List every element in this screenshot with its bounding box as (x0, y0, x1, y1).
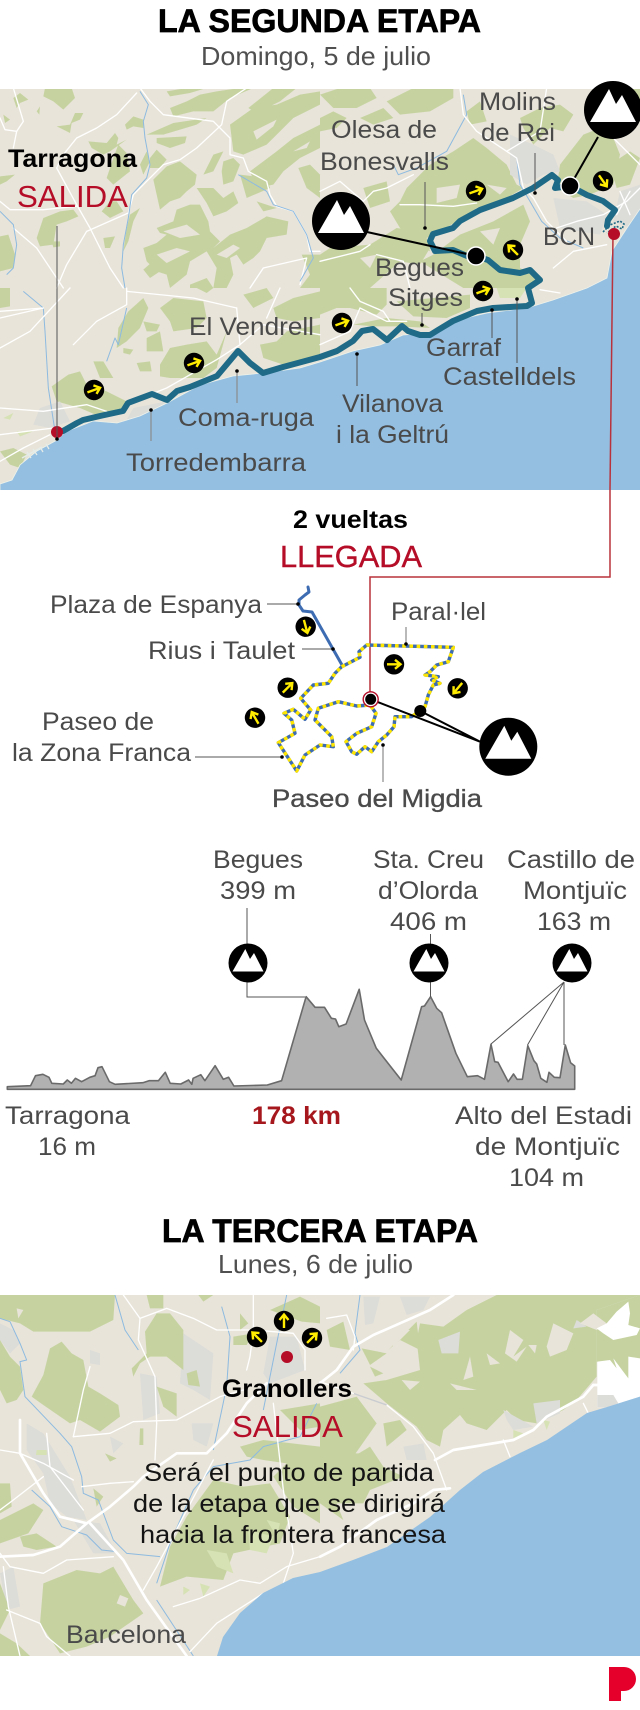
label: castillo: Montjuïc (523, 877, 627, 905)
heading: finish: LLEGADA (280, 539, 422, 574)
icon: mountain sta creu (410, 944, 448, 982)
leader: coma-ruga (235, 369, 239, 403)
label: begues (213, 846, 303, 905)
leader: castelldels (515, 297, 519, 363)
label: sta creu: Sta. Creu (373, 846, 484, 874)
route: barcelona detail (603, 221, 624, 233)
label: castillo: 163 m (537, 908, 611, 936)
sea (215, 1396, 640, 1658)
icon: direction arrow (293, 614, 318, 639)
icon: direction arrow (81, 377, 107, 403)
panel: map of stage three (0, 1295, 640, 1658)
label: granollers: Granollers (222, 1375, 352, 1403)
marker: barcelona (608, 228, 620, 240)
chart: elevation profile (5, 846, 635, 1192)
labels: map of stage two (8, 88, 595, 477)
route: circuit (278, 645, 453, 771)
labels: map of stage two: Molins (479, 88, 556, 116)
subtitle: domingo: Domingo, 5 de julio (201, 41, 431, 71)
labels: map of stage two: El Vendrell (189, 313, 314, 341)
icon: direction arrow (443, 674, 472, 703)
labels: map of stage two: Olesa de (331, 116, 437, 144)
label: distance: 178 km (252, 1102, 341, 1130)
route: stage two (57, 175, 615, 432)
labels: map of stage two: Castelldels (443, 363, 576, 391)
label: paseo del migdia: Paseo del Migdia (272, 785, 482, 813)
label: sta creu: 406 m (390, 908, 467, 936)
text block: description: de la etapa que se dirigirá (133, 1490, 445, 1518)
port of tarragona (22, 444, 49, 458)
logo (609, 1667, 636, 1701)
label: alto del estadi (455, 1102, 632, 1192)
labels: map of stage two: BCN (543, 223, 595, 251)
icon: mountain castillo (552, 944, 592, 982)
label: alto del estadi: Alto del Estadi (455, 1102, 632, 1130)
text block: description (133, 1459, 446, 1549)
icon: direction arrow (589, 167, 617, 195)
labels: map of stage two: i la Geltrú (336, 421, 449, 449)
text block: description: Será el punto de partida (144, 1459, 434, 1487)
label: sta creu (373, 846, 484, 936)
icon: direction arrow (298, 1324, 326, 1352)
subtitle: lunes: Lunes, 6 de julio (218, 1249, 413, 1279)
label: alto del estadi: de Montjuïc (475, 1133, 620, 1161)
label: paseo del migdia (272, 743, 482, 813)
panel: finish circuit in montjuic (12, 506, 537, 813)
route: approach from plaza de espanya (299, 587, 342, 665)
label: castillo (507, 846, 635, 936)
heading: two laps: 2 vueltas (293, 506, 408, 534)
label: tarragona: 16 m (38, 1133, 96, 1161)
labels: map of stage two: Begues (375, 254, 464, 282)
label: begues: Begues (213, 846, 303, 874)
labels: map of stage two: Vilanova (342, 390, 443, 418)
icon: mountain pass santa creu (561, 81, 640, 195)
leader: garraf (490, 308, 494, 338)
title: la segunda etapa: LA SEGUNDA ETAPA (158, 3, 481, 39)
marker: granollers (281, 1351, 293, 1363)
leader: molins (533, 153, 537, 195)
marker: tarragona start (51, 426, 63, 438)
label: rius i taulet: Rius i Taulet (148, 637, 295, 665)
icon: direction arrow (470, 278, 496, 304)
icon: mountain passes on circuit (363, 692, 537, 776)
labels: map of stage two: SALIDA (17, 179, 128, 214)
sea (0, 206, 640, 492)
labels: map of stage two: Bonesvalls (320, 148, 449, 176)
labels: map of stage two: Torredembarra (126, 449, 306, 477)
label: begues: 399 m (220, 877, 296, 905)
labels: map of stage two: Garraf (426, 334, 501, 362)
labels: map of stage two: de Rei (481, 119, 555, 147)
icon: direction arrow (241, 704, 269, 732)
leader: sitges (420, 313, 424, 327)
label: paral·lel (391, 598, 486, 646)
icon: direction arrow (181, 350, 207, 376)
label: alto del estadi: 104 m (509, 1164, 584, 1192)
icon: direction arrow (329, 310, 355, 336)
connector: red line from barcelona to finish (370, 234, 613, 693)
leaders: profile (247, 908, 564, 1045)
label: paseo de la zona franca: Paseo de (42, 708, 154, 736)
label: tarragona: Tarragona (5, 1102, 130, 1130)
label: paseo de la zona franca (12, 708, 284, 767)
leader: olesa (423, 182, 427, 230)
labels: map of stage two: Coma-ruga (178, 404, 314, 432)
icon: direction arrow (273, 673, 302, 702)
label: paseo de la zona franca: la Zona Franca (12, 739, 191, 767)
icon: direction arrow (384, 654, 404, 674)
icon: direction arrow (243, 1323, 271, 1351)
leader: tarragona (55, 226, 59, 441)
labels: map of stage two: Sitges (388, 284, 463, 312)
icon: mountain begues (228, 944, 268, 982)
label: tarragona (5, 1102, 130, 1161)
icon: direction arrow (274, 1311, 294, 1331)
label: start: SALIDA (232, 1409, 343, 1444)
icon: direction arrow (463, 178, 489, 204)
panel: map of stage two (0, 88, 640, 492)
labels: map of stage two: Tarragona (8, 145, 138, 173)
leader: vilanova (355, 352, 359, 386)
leader: torredembarra (149, 408, 153, 441)
icon: mountain pass begues (312, 192, 485, 265)
label: plaza de espanya: Plaza de Espanya (50, 591, 262, 619)
title: la tercera etapa: LA TERCERA ETAPA (162, 1213, 478, 1249)
icon: direction arrow (499, 236, 527, 264)
label: sta creu: d’Olorda (378, 877, 478, 905)
label: barcelona: Barcelona (66, 1621, 186, 1649)
label: paral·lel: Paral·lel (391, 598, 486, 626)
text block: description: hacia la frontera francesa (140, 1521, 446, 1549)
label: castillo: Castillo de (507, 846, 635, 874)
